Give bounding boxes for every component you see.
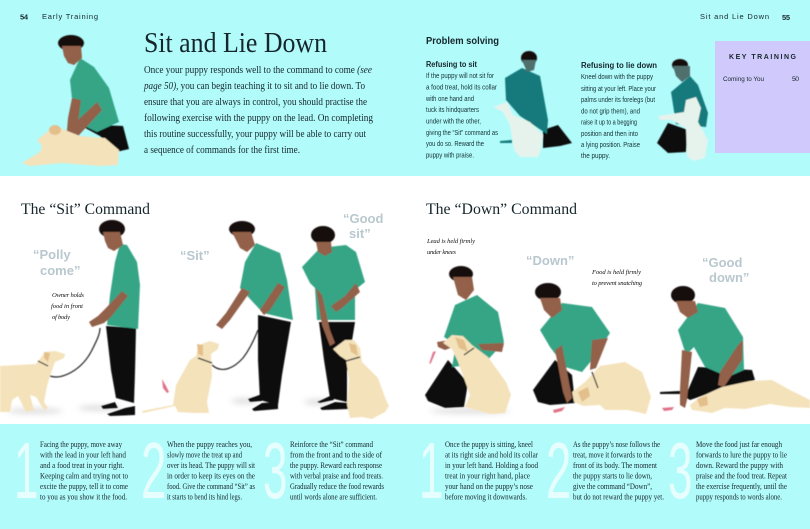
text: refusing to sit: with one hand and <box>425 96 474 103</box>
step 1: sit: to you as you show it the food. <box>40 492 127 502</box>
step 2: down: but do not reward the puppy yet. <box>573 492 664 502</box>
heading: down command: The “Down” Command <box>426 201 577 218</box>
text: refusing to sit: Refusing to sit <box>426 60 477 69</box>
text: refusing to sit: under with the other, <box>426 118 481 126</box>
panel: key training: 50 <box>792 76 799 83</box>
caption: owner holds food: food in front <box>51 303 83 310</box>
page header right <box>700 12 790 22</box>
photo: down step 1 <box>425 266 511 414</box>
label: sit: “Sit” <box>180 248 210 263</box>
text: refusing to lie down: raise it up to a begging <box>581 120 637 126</box>
step 2: down: the puppy starts to lie down, <box>573 472 652 480</box>
step 2: sit <box>141 426 256 515</box>
caption: owner holds food: of body <box>52 314 70 321</box>
text: refusing to lie down: a lying position. Praise <box>581 142 640 149</box>
step 2: down: treat, move it forwards to the <box>573 450 652 460</box>
step 1: down: before moving it downwards. <box>445 492 527 502</box>
step 2: sit: When the puppy reaches you, <box>167 440 252 449</box>
photo: sit step 3 <box>302 226 389 419</box>
step 1: sit: Facing the puppy, move away <box>40 440 123 449</box>
text: refusing to sit: giving the “Sit” command as <box>426 130 498 137</box>
label: good down: down” <box>709 270 749 285</box>
caption: lead held firmly: Lead is held firmly <box>426 238 475 245</box>
text: refusing to sit: a food treat, hold its collar <box>426 84 498 92</box>
step 3: down <box>668 426 788 515</box>
photo: down step 2 <box>533 283 651 414</box>
panel: key training: KEY TRAINING <box>729 54 797 61</box>
caption: owner holds food: Owner holds <box>52 292 84 299</box>
page header left: Early Training <box>42 12 98 21</box>
text: refusing to sit <box>425 60 498 160</box>
label: polly come: come” <box>40 263 80 278</box>
text: refusing to lie down: Refusing to lie down <box>581 61 657 70</box>
intro text: Once your puppy responds well to the command to come (see <box>144 65 372 76</box>
text: refusing to lie down: sitting at your left. Place your <box>581 86 657 93</box>
intro text: a sequence of commands for the first time. <box>144 145 300 156</box>
step 3: down: puppy responds to words alone. <box>696 492 782 502</box>
step 3: down: 3 <box>668 426 692 515</box>
step 3: down: forwards to lure the puppy to lie <box>696 450 787 460</box>
label: good down <box>702 255 749 285</box>
step 1: sit <box>14 426 128 515</box>
step 1: down: Once the puppy is sitting, kneel <box>445 440 534 449</box>
text: refusing to sit: puppy with praise. <box>426 152 474 160</box>
step 2: down: 2 <box>546 426 571 515</box>
step 3: down: Move the food just far enough <box>696 440 782 449</box>
caption: food held firmly: to prevent snatching <box>592 280 643 287</box>
text: refusing to lie down: palms under its forelegs (but <box>581 97 655 104</box>
step 3: sit: Gradually reduce the food rewards <box>290 482 384 491</box>
step 2: down: give the command “Down”, <box>573 482 652 491</box>
photo: refusing to sit <box>493 51 572 157</box>
step 1: down <box>419 426 538 515</box>
text: refusing to lie down: Kneel down with the puppy <box>581 74 653 81</box>
step 2: down <box>546 426 664 515</box>
heading: sit command: The “Sit” Command <box>21 201 150 218</box>
intro text: page 50), you can begin teaching it to sit and to lie down. To <box>143 81 365 92</box>
text: refusing to sit: you do so. Reward the <box>426 141 484 148</box>
photo: sit step 1 <box>0 220 140 416</box>
text: refusing to sit: If the puppy will not sit for <box>426 73 495 80</box>
step 1: down: 1 <box>419 426 443 515</box>
step 1: down: your hand on the puppy’s nose <box>445 482 533 491</box>
caption: food held firmly: Food is held firmly <box>591 269 641 276</box>
intro text <box>143 65 373 156</box>
photo: refusing to lie down <box>657 59 708 161</box>
step 1: sit: and a food treat in your right. <box>40 461 124 470</box>
panel: problem solving <box>425 35 708 161</box>
text: refusing to lie down: position and then into <box>581 131 638 138</box>
step 3: sit: from the front and to the side of <box>290 450 382 460</box>
caption: lead held firmly <box>426 238 475 256</box>
step 3: sit: with verbal praise and food treats. <box>290 472 383 480</box>
intro text: ensure that you are always in control, you should practise the <box>144 97 367 108</box>
step 3: sit <box>263 426 384 515</box>
page header left: 54 <box>20 12 29 22</box>
panel: key training: Coming to You <box>723 76 764 83</box>
step 3: down: praise and the food treat. Repeat <box>696 472 788 480</box>
step 2: sit: over its head. The puppy will sit <box>167 461 256 470</box>
step 2: down: As the puppy’s nose follows the <box>573 440 660 449</box>
step 1: sit: excite the puppy, tell it to come <box>40 482 128 491</box>
text: refusing to lie down <box>581 61 657 160</box>
step 1: down: at its right side and hold its collar <box>445 450 538 460</box>
label: good sit <box>343 211 383 241</box>
caption: owner holds food <box>51 292 84 321</box>
step 3: down: down. Reward the puppy with <box>696 461 783 470</box>
step 3: down: the exercise frequently, until the <box>696 482 787 491</box>
photo: sit step 2 <box>142 221 293 413</box>
intro text: following exercise with the puppy on the lead. On completing <box>144 113 373 124</box>
step 3: sit: Reinforce the “Sit” command <box>290 440 373 449</box>
label: good sit: sit” <box>349 226 371 241</box>
panel: key training <box>715 41 810 153</box>
caption: food held firmly <box>591 269 643 287</box>
label: polly come: “Polly <box>33 247 71 262</box>
page header right: 55 <box>782 13 790 22</box>
step 2: sit: food. Give the command “Sit” as <box>167 482 255 491</box>
label: polly come <box>33 247 80 278</box>
step 1: down: treat in your right hand, place <box>445 472 530 480</box>
heading: problem solving: Problem solving <box>426 35 499 47</box>
step 1: sit: 1 <box>14 426 38 515</box>
page header left <box>20 12 98 22</box>
title: Sit and Lie Down <box>144 27 327 59</box>
step 1: down: in your left hand. Holding a food <box>445 461 538 470</box>
step 3: sit: the puppy. Reward each response <box>290 461 382 470</box>
step 3: sit: 3 <box>263 426 287 515</box>
step 2: sit: in order to keep its eyes on the <box>167 472 255 480</box>
step 2: sit: it starts to bend its hind legs. <box>167 492 242 502</box>
photo: down step 3 <box>660 286 810 413</box>
caption: lead held firmly: under knees <box>427 249 456 256</box>
step 2: sit: slowly move the treat up and <box>167 450 242 460</box>
step 2: down: front of its body. The moment <box>573 461 658 470</box>
label: good sit: “Good <box>343 211 383 226</box>
page header right: Sit and Lie Down <box>700 12 769 21</box>
text: refusing to lie down: do not grip them), and <box>581 108 640 116</box>
text: refusing to sit: tuck its hindquarters <box>426 107 479 114</box>
photo: man with lying puppy <box>22 35 129 166</box>
step 1: sit: with the lead in your left hand <box>40 450 126 460</box>
label: down: “Down” <box>526 253 574 268</box>
intro text: this routine successfully, your puppy will be able to carry out <box>144 129 366 140</box>
step 2: sit: 2 <box>141 426 166 515</box>
label: good down: “Good <box>702 255 742 270</box>
step 3: sit: until words alone are sufficient. <box>290 492 377 502</box>
text: refusing to lie down: the puppy. <box>581 153 610 160</box>
step 1: sit: Keeping calm and trying not to <box>40 472 128 480</box>
